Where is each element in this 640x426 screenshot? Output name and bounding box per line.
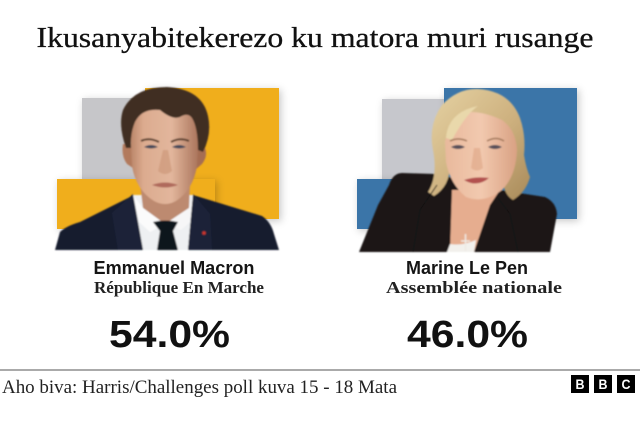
panel: Le Pen portrait [357,88,577,252]
candidate name: Le Pen: Marine Le Pen [406,258,528,278]
party: Macron: République En Marche [94,278,264,297]
icon: BBC logo: B [598,376,608,392]
Le Pen figure [359,89,557,252]
title: Ikusanyabitekerezo ku matora muri rusange [36,22,594,54]
grey background block [382,99,448,181]
icon: BBC logo: B [576,376,584,392]
source note: Aho biva: Harris/Challenges poll kuva 15 - 18 Mata [2,377,398,398]
panel: Macron portrait [55,87,279,250]
percentage: Le Pen: 46.0% [407,314,528,356]
grey background block [82,98,152,180]
small blue block [357,179,397,229]
icon: BBC logo: C [622,376,630,392]
icon: BBC logo [571,375,635,393]
large yellow block [145,88,279,219]
large blue block [444,88,577,219]
party: Le Pen: Assemblée nationale [386,278,563,297]
small yellow block [57,179,215,229]
candidate name: Macron: Emmanuel Macron [94,258,255,278]
Macron figure [55,87,279,250]
percentage: Macron: 54.0% [109,314,230,356]
